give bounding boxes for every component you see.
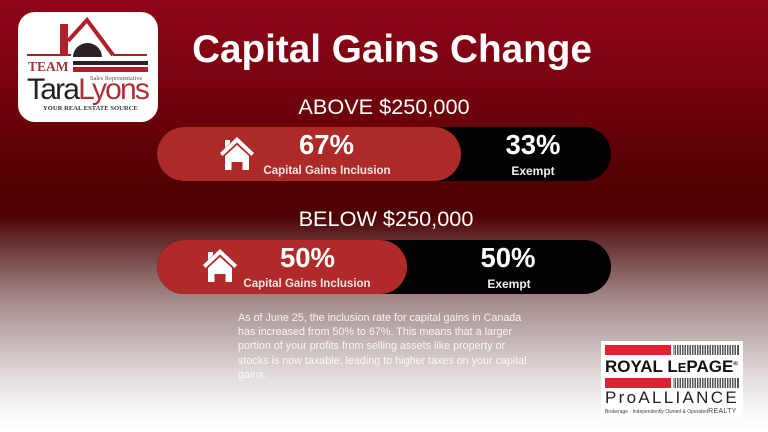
bar segment: 50% inclusion: [157, 240, 407, 294]
title: Capital Gains Change: [192, 28, 592, 71]
icon: house: [220, 137, 254, 170]
paragraph: explanation: has increased from 50% to 67%. This means that a larger: [238, 326, 512, 338]
logo: Royal LePage ProAlliance: [601, 341, 743, 417]
paragraph: explanation: portion of your profits from selling assets like property or: [238, 340, 505, 352]
paragraph: explanation: As of June 25, the inclusion rate for capital gains in Canada: [238, 312, 521, 324]
label: Capital Gains Inclusion: Capital Gains Inclusion: [243, 278, 371, 290]
paragraph: explanation: gains.: [238, 369, 267, 381]
logo text: TaraLyons: TaraLyons: [27, 73, 148, 106]
bar: above $250,000: [157, 127, 611, 181]
heading: below $250,000: BELOW $250,000: [299, 206, 473, 231]
logo text: ProAlliance: ProALLIANCE: [605, 388, 739, 407]
icon: house roof: [27, 16, 148, 72]
label: Exempt: Exempt: [511, 164, 555, 178]
paragraph: explanation: stocks is now taxable, leading to higher taxes on your capital: [238, 355, 527, 367]
value: 50%: 50%: [480, 242, 536, 273]
logo text: TEAM: TEAM: [28, 59, 68, 74]
logo text: brokerage line: Brokerage · Independently Owned & OperatedREALTY: [605, 408, 737, 415]
value: 50%: 50%: [280, 242, 335, 273]
value: 67%: 67%: [299, 129, 354, 160]
bar: below $250,000: [157, 240, 611, 294]
label: Capital Gains Inclusion: Capital Gains Inclusion: [263, 165, 391, 177]
value: 33%: 33%: [505, 129, 561, 160]
icon: house: [203, 249, 237, 282]
logo text: tagline: YOUR REAL ESTATE SOURCE: [43, 105, 138, 112]
bar segment: 67% inclusion: [157, 127, 461, 181]
paragraph: explanation: [238, 312, 527, 381]
logo text: Royal LePage: ROYAL LEPAGE®: [605, 357, 738, 376]
logo text: Sales Representative: Sales Representative: [90, 75, 142, 82]
logo: Team Tara Lyons: [18, 12, 158, 122]
label: Exempt: Exempt: [487, 277, 531, 291]
logo stripes top: [605, 345, 739, 388]
heading: above $250,000: ABOVE $250,000: [298, 94, 470, 119]
